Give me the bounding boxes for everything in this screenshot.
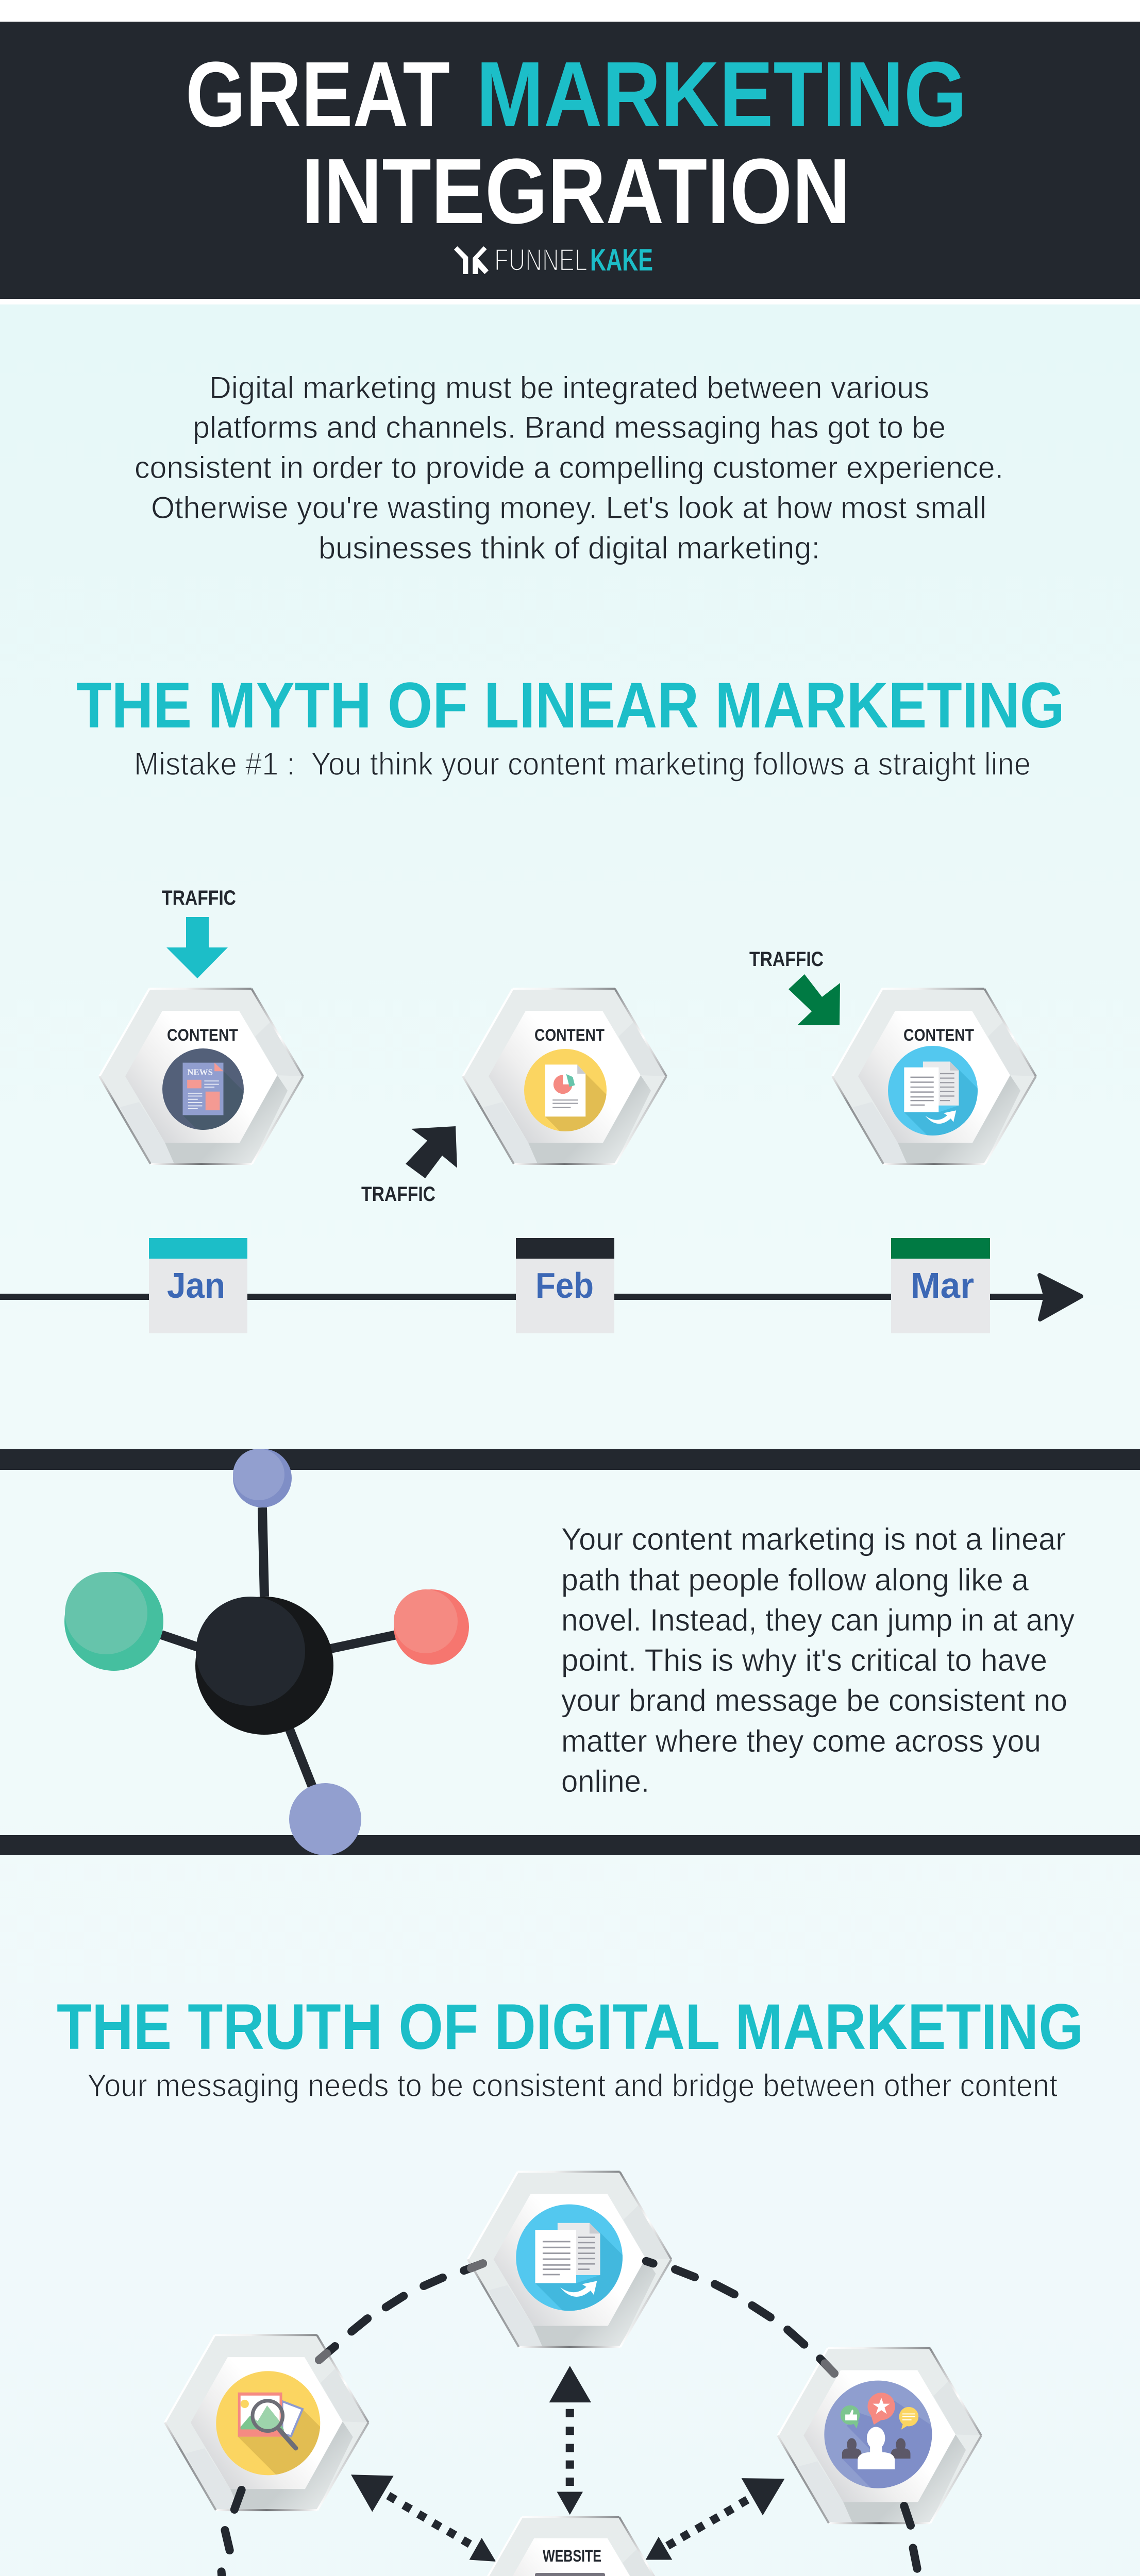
icon: documents (888, 1046, 978, 1136)
calendar: march: Mar (911, 1265, 974, 1306)
logo: header FunnelKake (454, 243, 653, 277)
diagram: molecule (64, 1449, 469, 1855)
diagram: content network (165, 2172, 981, 2576)
text block: not a linear path: Your content marketing is not a linear (561, 1522, 1066, 1556)
title (186, 43, 967, 243)
label: content: CONTENT (534, 1026, 605, 1044)
label: website: WEBSITE (543, 2547, 601, 2565)
text block: introduction: Otherwise you're wasting money. Let's look at how most small (151, 490, 986, 525)
hexagon: website hub (474, 2517, 668, 2576)
hexagon: social community (778, 2348, 981, 2523)
hexagon: image search (165, 2335, 368, 2510)
icon: pie chart document (524, 1049, 611, 1136)
text block: introduction (135, 370, 1003, 565)
arrows: website to community (646, 2478, 784, 2560)
timeline (0, 1238, 1081, 1333)
content hexagon: february report (463, 989, 666, 1164)
title: INTEGRATION (301, 140, 850, 243)
title: GREAT (186, 43, 450, 146)
content hexagon: january news (99, 989, 303, 1164)
arrows: website to image search (351, 2475, 496, 2562)
icon: browser with star (535, 2573, 605, 2576)
text block: introduction: consistent in order to provide a compelling customer experience. (135, 450, 1003, 485)
icon: community (824, 2381, 945, 2502)
content hexagon: march documents (832, 989, 1036, 1164)
text block: not a linear path: novel. Instead, they can jump in at any (561, 1603, 1075, 1637)
icon: news (162, 1048, 248, 1134)
logo: header FunnelKake: FUNNEL (494, 243, 588, 277)
text block: introduction: businesses think of digital marketing: (318, 531, 820, 565)
hexagon: documents (468, 2172, 672, 2347)
text block: not a linear path: your brand message be consistent no (561, 1683, 1067, 1718)
text block: not a linear path: path that people follow along like a (561, 1563, 1029, 1597)
subheading: consistent messaging: Your messaging needs to be consistent and bridge between other content (87, 2068, 1058, 2104)
arrow: green traffic (789, 974, 840, 1025)
panel: header banner (0, 22, 1140, 299)
label: traffic 1: TRAFFIC (162, 887, 236, 909)
arrow: dark traffic (406, 1126, 457, 1178)
text block: not a linear path (561, 1522, 1075, 1799)
subheading: mistake 1: Mistake #1 : You think your content marketing follows a straight line (134, 747, 1031, 782)
title: MARKETING (476, 43, 967, 146)
calendar: january: Jan (167, 1265, 225, 1306)
calendar: january (149, 1238, 247, 1333)
text block: introduction: platforms and channels. Brand messaging has got to be (193, 410, 946, 445)
label: traffic 3: TRAFFIC (749, 948, 824, 971)
icon: image search (216, 2371, 333, 2488)
label: content: CONTENT (903, 1026, 974, 1044)
label: content: CONTENT (167, 1026, 238, 1044)
logo: header FunnelKake: KAKE (590, 243, 653, 277)
text block: not a linear path: online. (561, 1764, 649, 1799)
arrows: website to documents (549, 2366, 591, 2515)
text block: not a linear path: matter where they come across you (561, 1724, 1041, 1758)
calendar: february (516, 1238, 614, 1333)
text block: introduction: Digital marketing must be integrated between various (209, 370, 929, 405)
calendar: february: Feb (535, 1265, 594, 1306)
arrow: teal traffic (166, 917, 228, 978)
dashed ring connecting content (220, 2261, 918, 2576)
text block: not a linear path: point. This is why it's critical to have (561, 1643, 1047, 1677)
icon: news: NEWS (187, 1067, 213, 1077)
icon: documents (516, 2204, 623, 2311)
calendar: march (891, 1238, 990, 1333)
label: traffic 2: TRAFFIC (361, 1183, 435, 1206)
arrow: timeline head (1040, 1275, 1081, 1319)
panel: molecule band (0, 1449, 1140, 1855)
